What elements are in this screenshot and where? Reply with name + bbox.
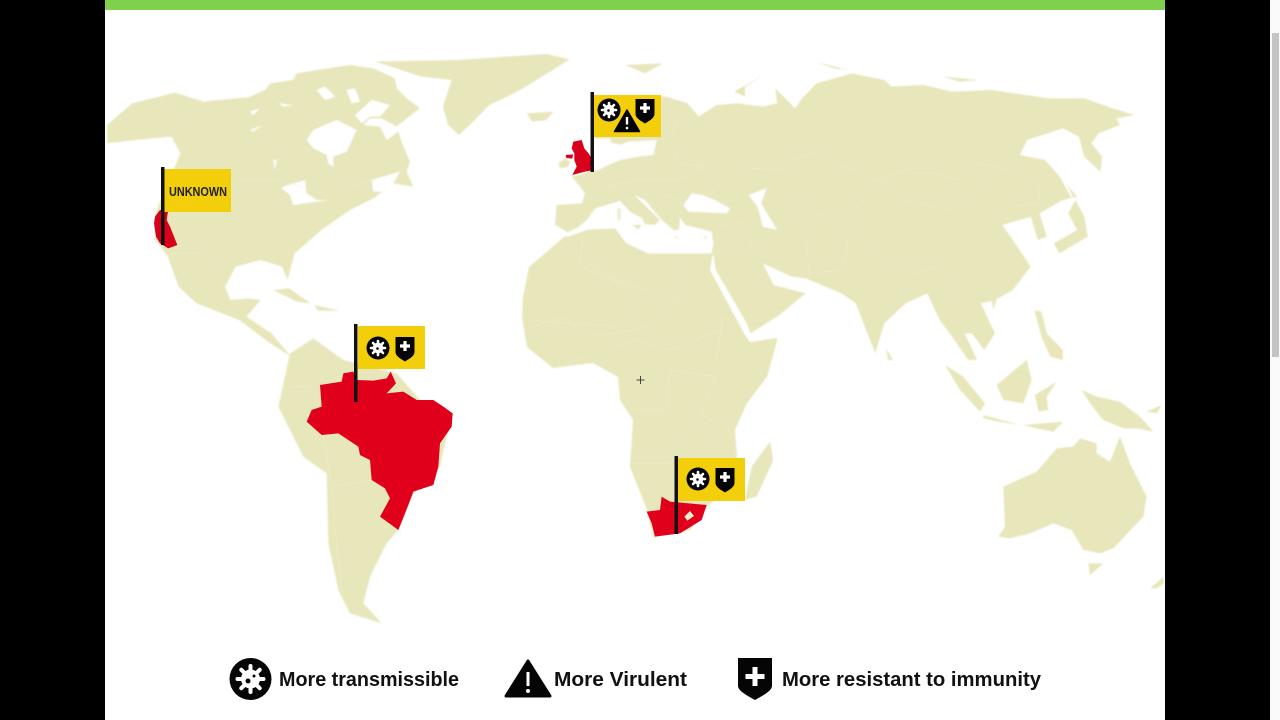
icon: more resistant to immunity	[396, 337, 414, 362]
Greenland	[375, 54, 570, 135]
flag: California, unknown	[161, 167, 231, 245]
legend icon: more resistant to immunity	[738, 658, 772, 700]
Caspian Sea, Japan and Asian islands	[625, 62, 1088, 360]
country borders	[168, 102, 1040, 603]
icon: more resistant to immunity	[716, 468, 734, 492]
legend	[230, 658, 1042, 700]
map registration cross mark	[636, 376, 644, 384]
world map land masses	[107, 54, 1164, 623]
Australia and Southeast Asia islands	[945, 360, 1164, 588]
flag label: UNKNOWN	[169, 185, 227, 199]
North America	[107, 65, 554, 357]
legend label: more transmissible: More transmissible	[279, 668, 459, 691]
highlighted country: California	[154, 210, 177, 248]
legend label: more virulent: More Virulent	[554, 668, 687, 691]
highlighted country: Brazil	[307, 372, 453, 530]
icon: more transmissible	[598, 98, 620, 122]
icon: more transmissible	[686, 468, 710, 490]
flag: South Africa	[674, 456, 745, 534]
icon: more virulent	[614, 110, 640, 132]
Europe	[552, 130, 765, 255]
icon: more resistant to immunity	[636, 99, 654, 124]
Madagascar	[745, 442, 773, 500]
highlighted country: South Africa	[647, 497, 707, 537]
flag: United Kingdom	[590, 92, 661, 172]
Africa	[522, 228, 777, 537]
highlighted country: United Kingdom	[566, 140, 594, 175]
flag: Brazil	[354, 324, 425, 402]
legend label: more resistant to immunity: More resistant to immunity	[782, 668, 1042, 691]
South America	[278, 338, 452, 623]
legend icon: more virulent	[506, 661, 550, 696]
Eurasia	[595, 73, 1134, 360]
icon: more transmissible	[366, 336, 390, 360]
legend icon: more transmissible	[230, 658, 272, 700]
green header bar	[105, 0, 1165, 10]
